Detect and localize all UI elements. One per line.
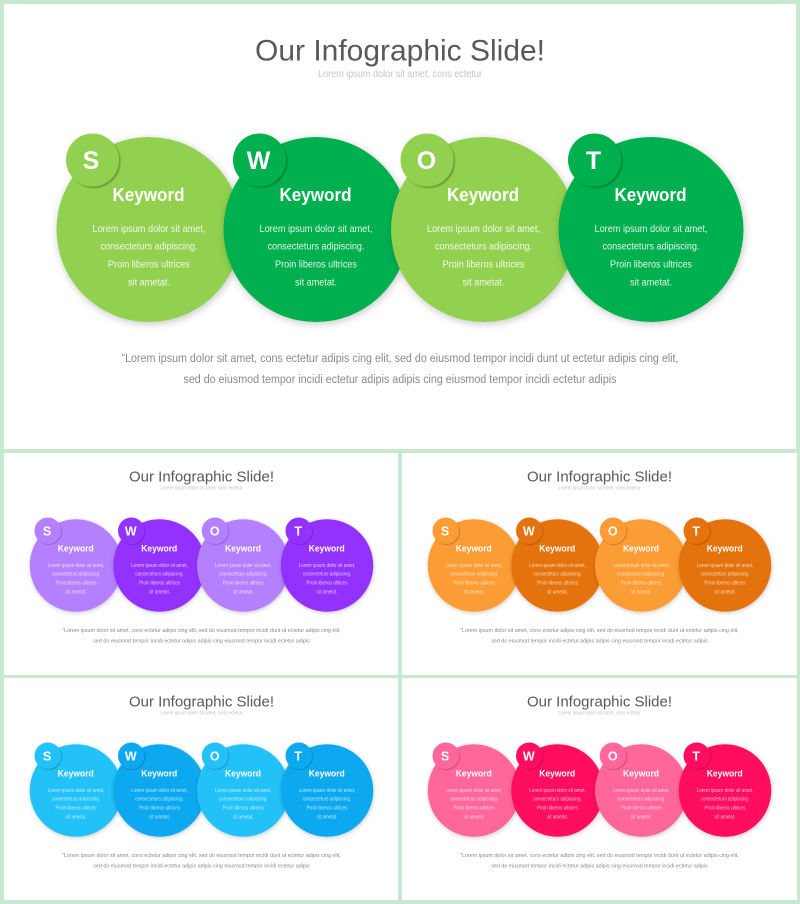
- body text S: consecteturs adipiscing.: [450, 796, 498, 802]
- body text S: [48, 563, 104, 596]
- body text O: Proin liberos ultrices: [621, 806, 662, 812]
- badge T: T: [294, 524, 302, 538]
- body text W: [529, 788, 586, 820]
- body text T: consecteturs adipiscing.: [303, 796, 351, 802]
- body text O: [613, 788, 670, 820]
- title: Our Infographic Slide!: [255, 34, 545, 68]
- body text T: Lorem ipsum dolor sit amet,: [697, 563, 753, 569]
- body text S: consecteturs adipiscing.: [450, 572, 498, 578]
- keyword W: Keyword: [141, 768, 178, 778]
- subtitle: Lorem ipsum dolor sit amet, cons ectetur: [160, 485, 243, 491]
- circle T: [281, 518, 373, 612]
- keyword T: Keyword: [707, 543, 743, 553]
- body text W: sit ametat.: [547, 590, 568, 596]
- badge S: [66, 134, 119, 186]
- body text S: Lorem ipsum dolor sit amet,: [446, 788, 502, 794]
- badge O: O: [608, 749, 618, 763]
- circle O: [595, 742, 688, 837]
- body text O: sit ametat.: [233, 814, 254, 820]
- body text T: Proin liberos ultrices: [306, 580, 348, 586]
- body text T: sit ametat.: [714, 814, 736, 820]
- footer quote: [460, 853, 739, 869]
- body text W: sit ametat.: [149, 590, 170, 596]
- circle O: [595, 518, 688, 612]
- badge O: O: [210, 524, 220, 538]
- body text T: sit ametat.: [714, 590, 736, 596]
- body text T: [299, 788, 355, 820]
- keyword S: Keyword: [456, 768, 492, 778]
- body text W: Proin liberos ultrices: [139, 580, 180, 586]
- footer quote: [122, 353, 678, 386]
- panel: pink slide: [402, 678, 797, 900]
- badge S: S: [43, 749, 51, 763]
- body text T: consecteturs adipiscing.: [602, 242, 700, 252]
- body text S: consecteturs adipiscing.: [52, 572, 100, 578]
- footer quote: “Lorem ipsum dolor sit amet, cons ectetur adipis cing elit, sed do eiusmod tempor incidi dunt ut ectetur adipis cing elit,: [122, 353, 678, 365]
- body text W: consecteturs adipiscing.: [135, 572, 184, 578]
- body text O: consecteturs adipiscing.: [617, 796, 666, 802]
- body text T: sit ametat.: [630, 278, 672, 288]
- body text S: Proin liberos ultrices: [454, 806, 495, 812]
- body text T: [697, 788, 753, 820]
- subtitle: Lorem ipsum dolor sit amet, cons ectetur: [318, 69, 483, 80]
- body text T: Proin liberos ultrices: [610, 260, 692, 270]
- body text W: consecteturs adipiscing.: [533, 796, 582, 802]
- footer quote: [62, 853, 341, 869]
- footer quote: “Lorem ipsum dolor sit amet, cons ectetur adipis cing elit, sed do eiusmod tempor incidi dunt ut ectetur adipis cing elit,: [62, 628, 341, 634]
- keyword O: Keyword: [623, 543, 659, 553]
- body text W: consecteturs adipiscing.: [268, 242, 364, 252]
- keyword O: Keyword: [447, 184, 519, 205]
- body text O: Lorem ipsum dolor sit amet,: [613, 788, 670, 794]
- circle S: [428, 518, 520, 612]
- keyword T: Keyword: [614, 184, 686, 205]
- body text S: Proin liberos ultrices: [454, 580, 495, 586]
- title: Our Infographic Slide!: [527, 468, 672, 485]
- body text W: Lorem ipsum dolor sit amet,: [529, 563, 586, 569]
- body text T: Proin liberos ultrices: [704, 806, 746, 812]
- circle T: [679, 518, 771, 612]
- body text S: Lorem ipsum dolor sit amet,: [48, 788, 104, 794]
- body text S: [446, 563, 502, 596]
- body text S: sit ametat.: [464, 590, 484, 596]
- body text T: Lorem ipsum dolor sit amet,: [299, 563, 355, 569]
- body text O: Proin liberos ultrices: [621, 580, 662, 586]
- body text W: Proin liberos ultrices: [139, 806, 180, 812]
- body text T: Lorem ipsum dolor sit amet,: [594, 224, 708, 235]
- body text T: consecteturs adipiscing.: [701, 796, 749, 802]
- body text S: Proin liberos ultrices: [56, 806, 97, 812]
- circle O: [197, 742, 290, 837]
- body text T: Lorem ipsum dolor sit amet,: [299, 788, 355, 794]
- body text W: sit ametat.: [295, 278, 337, 288]
- footer quote: sed do eiusmod tempor incidi ectetur adipis adipis cing eiusmod tempor incidi ectetur adipis: [491, 863, 708, 869]
- keyword O: Keyword: [623, 768, 659, 778]
- keyword T: Keyword: [707, 768, 743, 778]
- body text W: Lorem ipsum dolor sit amet,: [260, 224, 372, 235]
- body text S: sit ametat.: [66, 814, 86, 820]
- badge W: [233, 134, 286, 186]
- panel: orange slide: [402, 453, 797, 675]
- keyword W: Keyword: [539, 768, 576, 778]
- body text T: Lorem ipsum dolor sit amet,: [697, 788, 753, 794]
- body text S: [446, 788, 502, 820]
- body text O: Proin liberos ultrices: [442, 260, 524, 270]
- body text O: [613, 563, 670, 596]
- badge S: S: [441, 524, 449, 538]
- circle S: [428, 742, 520, 837]
- body text O: Proin liberos ultrices: [223, 580, 264, 586]
- circle W: [113, 518, 206, 612]
- footer quote: “Lorem ipsum dolor sit amet, cons ectetur adipis cing elit, sed do eiusmod tempor incidi dunt ut ectetur adipis cing elit,: [62, 853, 341, 859]
- body text S: Proin liberos ultrices: [108, 260, 190, 270]
- keyword W: Keyword: [141, 543, 178, 553]
- badge W: W: [125, 524, 137, 538]
- body text S: sit ametat.: [464, 814, 484, 820]
- keyword O: Keyword: [225, 768, 261, 778]
- badge T: [568, 134, 621, 186]
- body text W: Proin liberos ultrices: [537, 806, 578, 812]
- keyword W: Keyword: [280, 184, 352, 205]
- circle S: [30, 742, 122, 837]
- badge T: T: [692, 524, 700, 538]
- body text T: [299, 563, 355, 596]
- body text T: consecteturs adipiscing.: [303, 572, 351, 578]
- body text O: sit ametat.: [462, 278, 504, 288]
- body text W: Lorem ipsum dolor sit amet,: [131, 788, 188, 794]
- body text W: sit ametat.: [547, 814, 568, 820]
- badge S: S: [441, 749, 449, 763]
- keyword T: Keyword: [309, 543, 345, 553]
- title: Our Infographic Slide!: [129, 693, 274, 710]
- body text T: consecteturs adipiscing.: [701, 572, 749, 578]
- body text O: [215, 788, 272, 820]
- badge T: T: [692, 749, 700, 763]
- body text S: consecteturs adipiscing.: [52, 796, 100, 802]
- badge T: T: [294, 749, 302, 763]
- badge W: W: [125, 749, 137, 763]
- body text O: Lorem ipsum dolor sit amet,: [613, 563, 670, 569]
- circle T: [558, 134, 744, 322]
- panel: blue slide: [4, 678, 398, 900]
- title: Our Infographic Slide!: [527, 693, 672, 710]
- body text S: Proin liberos ultrices: [56, 580, 97, 586]
- body text W: [131, 563, 188, 596]
- panel: main green slide: [4, 4, 796, 449]
- circle S: [30, 518, 122, 612]
- body text O: consecteturs adipiscing.: [219, 796, 268, 802]
- body text S: [92, 224, 206, 288]
- keyword S: Keyword: [112, 184, 184, 205]
- footer quote: [62, 628, 341, 644]
- subtitle: Lorem ipsum dolor sit amet, cons ectetur: [558, 485, 641, 491]
- footer quote: “Lorem ipsum dolor sit amet, cons ectetur adipis cing elit, sed do eiusmod tempor incidi dunt ut ectetur adipis cing elit,: [460, 628, 739, 634]
- circle O: [197, 518, 290, 612]
- body text O: consecteturs adipiscing.: [617, 572, 666, 578]
- body text S: consecteturs adipiscing.: [100, 242, 198, 252]
- body text S: sit ametat.: [128, 278, 170, 288]
- footer quote: [460, 628, 739, 644]
- subtitle: Lorem ipsum dolor sit amet, cons ectetur: [558, 710, 641, 716]
- body text W: [529, 563, 586, 596]
- body text O: [427, 224, 540, 288]
- badge S: S: [43, 524, 51, 538]
- body text S: Lorem ipsum dolor sit amet,: [446, 563, 502, 569]
- title: Our Infographic Slide!: [129, 468, 274, 485]
- circle W: [511, 518, 604, 612]
- badge S: S: [83, 147, 99, 175]
- badge O: O: [417, 147, 436, 175]
- body text O: Proin liberos ultrices: [223, 806, 264, 812]
- circle W: [113, 742, 206, 837]
- panel: purple slide: [4, 453, 398, 675]
- badge W: W: [523, 524, 535, 538]
- badge O: [400, 134, 454, 186]
- circle O: [391, 134, 576, 322]
- badge O: O: [608, 524, 618, 538]
- circle T: [679, 742, 771, 837]
- circle W: [511, 742, 604, 837]
- body text O: Lorem ipsum dolor sit amet,: [215, 788, 272, 794]
- keyword S: Keyword: [58, 543, 94, 553]
- body text O: Lorem ipsum dolor sit amet,: [215, 563, 272, 569]
- footer quote: “Lorem ipsum dolor sit amet, cons ectetur adipis cing elit, sed do eiusmod tempor incidi dunt ut ectetur adipis cing elit,: [460, 853, 739, 859]
- badge W: W: [523, 749, 535, 763]
- body text O: sit ametat.: [233, 590, 254, 596]
- subtitle: Lorem ipsum dolor sit amet, cons ectetur: [160, 710, 243, 716]
- circle S: [56, 134, 242, 322]
- body text O: [215, 563, 272, 596]
- footer quote: sed do eiusmod tempor incidi ectetur adipis adipis cing eiusmod tempor incidi ectetur adipis: [491, 638, 708, 644]
- keyword S: Keyword: [456, 543, 492, 553]
- body text O: sit ametat.: [631, 814, 652, 820]
- body text S: [48, 788, 104, 820]
- body text O: Lorem ipsum dolor sit amet,: [427, 224, 540, 235]
- keyword W: Keyword: [539, 543, 576, 553]
- footer quote: sed do eiusmod tempor incidi ectetur adipis adipis cing eiusmod tempor incidi ectetur adipis: [184, 374, 617, 386]
- body text S: Lorem ipsum dolor sit amet,: [92, 224, 206, 235]
- body text T: sit ametat.: [316, 814, 338, 820]
- body text T: Proin liberos ultrices: [306, 806, 348, 812]
- badge W: W: [247, 147, 271, 175]
- body text T: Proin liberos ultrices: [704, 580, 746, 586]
- body text W: Proin liberos ultrices: [537, 580, 578, 586]
- body text S: sit ametat.: [66, 590, 86, 596]
- body text W: Lorem ipsum dolor sit amet,: [529, 788, 586, 794]
- body text O: sit ametat.: [631, 590, 652, 596]
- body text S: Lorem ipsum dolor sit amet,: [48, 563, 104, 569]
- keyword O: Keyword: [225, 543, 261, 553]
- body text W: consecteturs adipiscing.: [135, 796, 184, 802]
- body text O: consecteturs adipiscing.: [219, 572, 268, 578]
- body text W: [131, 788, 188, 820]
- footer quote: sed do eiusmod tempor incidi ectetur adipis adipis cing eiusmod tempor incidi ectetur adipis: [93, 863, 310, 869]
- circle W: [224, 134, 408, 322]
- body text W: [260, 224, 372, 288]
- body text O: consecteturs adipiscing.: [435, 242, 532, 252]
- keyword T: Keyword: [309, 768, 345, 778]
- body text T: [594, 224, 708, 288]
- circle T: [281, 742, 373, 837]
- body text W: sit ametat.: [149, 814, 170, 820]
- body text W: Proin liberos ultrices: [275, 260, 357, 270]
- body text T: [697, 563, 753, 596]
- body text W: consecteturs adipiscing.: [533, 572, 582, 578]
- body text W: Lorem ipsum dolor sit amet,: [131, 563, 188, 569]
- badge T: T: [586, 147, 601, 175]
- keyword S: Keyword: [58, 768, 94, 778]
- body text T: sit ametat.: [316, 590, 338, 596]
- badge O: O: [210, 749, 220, 763]
- footer quote: sed do eiusmod tempor incidi ectetur adipis adipis cing eiusmod tempor incidi ectetur adipis: [93, 638, 310, 644]
